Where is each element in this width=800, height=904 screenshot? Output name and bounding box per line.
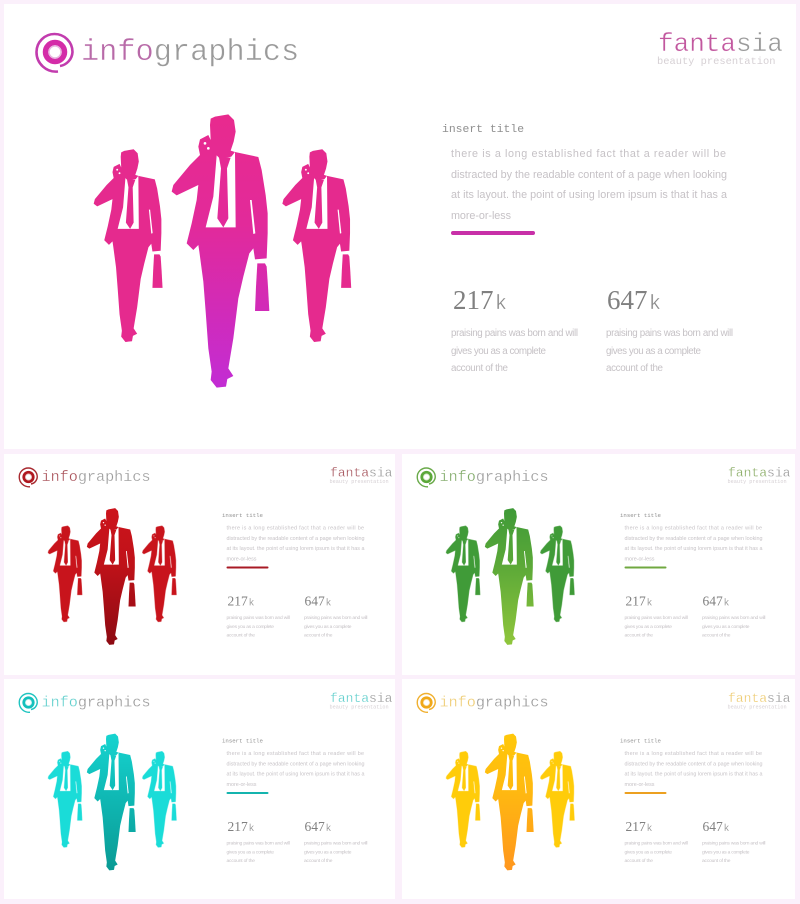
stat description 1: account of the bbox=[624, 632, 653, 638]
icon: green spiral logo bbox=[417, 468, 435, 487]
stat: 217k: k bbox=[495, 293, 507, 316]
stat description 2: account of the bbox=[304, 858, 333, 864]
stat: 217k: k bbox=[248, 598, 255, 610]
panel: yellow slide bbox=[402, 679, 795, 899]
text block: description bbox=[226, 751, 364, 788]
text block: description: at its layout. the point of using lorem ipsum is that it has a bbox=[226, 772, 364, 778]
stat description 2: account of the bbox=[702, 632, 731, 638]
illustration: three businessmen bbox=[94, 114, 351, 388]
text block: description: distracted by the readable content of a page when looking bbox=[451, 169, 727, 181]
stat: 647k: k bbox=[724, 598, 730, 610]
stat description 1: account of the bbox=[226, 632, 255, 638]
text block: description: more-or-less bbox=[451, 210, 512, 222]
stat description 1: praising pains was born and will bbox=[624, 615, 688, 621]
text block: insert title: insert title bbox=[222, 512, 264, 519]
stat description 2: gives you as a complete bbox=[702, 850, 750, 856]
stat description 1: praising pains was born and will bbox=[226, 840, 290, 846]
stat description 2 bbox=[606, 328, 733, 374]
text block: insert title: insert title bbox=[442, 124, 524, 136]
stat description 2: praising pains was born and will bbox=[606, 328, 733, 339]
heading: fantasia: fantasia bbox=[330, 691, 393, 706]
stat description 2 bbox=[304, 615, 368, 638]
stat description 2: praising pains was born and will bbox=[304, 840, 368, 846]
text block: description bbox=[226, 526, 364, 562]
stat description 2: gives you as a complete bbox=[702, 624, 750, 630]
stat description 2 bbox=[702, 615, 766, 638]
illustration: three businessmen bbox=[48, 508, 177, 645]
stat: 647k: 647 bbox=[702, 594, 723, 608]
subheading: beauty presentation: beauty presentation bbox=[657, 56, 775, 68]
accent bar bbox=[226, 792, 268, 794]
stat description 2: gives you as a complete bbox=[304, 850, 352, 856]
stat: 647k: k bbox=[649, 293, 661, 316]
text block: description: at its layout. the point of using lorem ipsum is that it has a bbox=[451, 189, 727, 201]
stat description 1: gives you as a complete bbox=[624, 850, 672, 856]
stat description 1: account of the bbox=[451, 363, 509, 374]
text block: description: distracted by the readable content of a page when looking bbox=[226, 762, 364, 768]
stat description 1: gives you as a complete bbox=[624, 624, 672, 630]
stat description 2: account of the bbox=[702, 858, 731, 864]
stat description 1 bbox=[226, 840, 290, 864]
stat description 2: account of the bbox=[606, 363, 664, 374]
stat: 647k: 647 bbox=[702, 819, 723, 834]
text block: insert title: insert title bbox=[620, 512, 662, 519]
panel: pink main slide bbox=[4, 4, 796, 449]
stat: 647k: k bbox=[326, 823, 332, 835]
stat: 647k: k bbox=[326, 598, 332, 610]
stat description 1: account of the bbox=[624, 858, 653, 864]
accent bar bbox=[451, 231, 535, 235]
stat: 647k: 647 bbox=[304, 594, 325, 608]
heading: infographics: infographics bbox=[42, 468, 151, 486]
panel: teal slide bbox=[4, 679, 395, 899]
stat description 1 bbox=[624, 840, 688, 864]
text block: description: more-or-less bbox=[624, 556, 655, 562]
icon: pink spiral logo bbox=[36, 34, 72, 72]
stat description 1: gives you as a complete bbox=[226, 850, 274, 856]
stat: 217k: k bbox=[646, 823, 653, 835]
stat description 1: praising pains was born and will bbox=[451, 328, 578, 339]
stat: 217k: 217 bbox=[228, 819, 248, 834]
stat: 217k: k bbox=[248, 823, 255, 835]
text block: description: at its layout. the point of using lorem ipsum is that it has a bbox=[624, 772, 762, 778]
subheading: beauty presentation: beauty presentation bbox=[330, 704, 389, 710]
stat description 2: praising pains was born and will bbox=[702, 840, 766, 846]
stat description 1: gives you as a complete bbox=[226, 624, 274, 630]
stat description 1 bbox=[451, 328, 578, 374]
stat description 1: account of the bbox=[226, 858, 255, 864]
stat description 1: praising pains was born and will bbox=[226, 615, 290, 621]
stat description 2 bbox=[304, 840, 368, 864]
heading: fantasia: fantasia bbox=[330, 466, 393, 480]
stat description 1: gives you as a complete bbox=[451, 346, 547, 357]
text block: insert title: insert title bbox=[620, 738, 662, 744]
stat description 1: praising pains was born and will bbox=[624, 840, 688, 846]
illustration: three businessmen bbox=[446, 734, 575, 870]
subheading: beauty presentation: beauty presentation bbox=[728, 704, 787, 710]
text block: description: there is a long established fact that a reader will be bbox=[624, 751, 762, 757]
stat description 2: gives you as a complete bbox=[304, 624, 352, 630]
text block: description bbox=[451, 148, 727, 222]
stat: 647k: 647 bbox=[304, 819, 325, 834]
subheading: beauty presentation: beauty presentation bbox=[728, 479, 787, 485]
text block: description: more-or-less bbox=[624, 782, 655, 788]
heading: fantasia: fantasia bbox=[658, 29, 783, 59]
heading: infographics: infographics bbox=[81, 36, 299, 70]
text block: description: more-or-less bbox=[226, 556, 257, 562]
text block: description: there is a long established fact that a reader will be bbox=[624, 526, 762, 532]
stat: 217k: 217 bbox=[228, 594, 248, 608]
text block: description: distracted by the readable content of a page when looking bbox=[624, 536, 762, 542]
icon: yellow spiral logo bbox=[417, 694, 435, 712]
stat: 217k: 217 bbox=[453, 285, 494, 315]
subheading: beauty presentation: beauty presentation bbox=[330, 479, 389, 485]
illustration: three businessmen bbox=[446, 508, 575, 645]
stat: 217k: 217 bbox=[626, 819, 646, 834]
text block: description: there is a long established fact that a reader will be bbox=[226, 526, 364, 532]
text block: insert title: insert title bbox=[222, 738, 264, 744]
stat description 2: praising pains was born and will bbox=[304, 615, 368, 621]
stat: 647k: 647 bbox=[607, 285, 648, 315]
accent bar bbox=[624, 566, 666, 568]
stat description 1 bbox=[624, 615, 688, 638]
text block: description: more-or-less bbox=[226, 782, 257, 788]
panel: green slide bbox=[402, 454, 795, 675]
stat: 217k: 217 bbox=[626, 594, 646, 608]
text block: description: there is a long established fact that a reader will be bbox=[226, 751, 364, 757]
icon: red spiral logo bbox=[19, 468, 37, 487]
text block: description bbox=[624, 751, 762, 788]
text block: description: distracted by the readable content of a page when looking bbox=[624, 762, 762, 768]
illustration: three businessmen bbox=[48, 734, 177, 870]
text block: description: there is a long established fact that a reader will be bbox=[451, 148, 726, 160]
stat description 2 bbox=[702, 840, 766, 864]
text block: description bbox=[624, 526, 762, 562]
stat: 217k: k bbox=[646, 598, 653, 610]
text block: description: at its layout. the point of using lorem ipsum is that it has a bbox=[624, 546, 762, 552]
stat description 1 bbox=[226, 615, 290, 638]
text block: description: at its layout. the point of using lorem ipsum is that it has a bbox=[226, 546, 364, 552]
accent bar bbox=[226, 566, 268, 568]
heading: fantasia: fantasia bbox=[728, 691, 791, 706]
stat description 2: gives you as a complete bbox=[606, 346, 702, 357]
text block: description: distracted by the readable content of a page when looking bbox=[226, 536, 364, 542]
panel: red slide bbox=[4, 454, 395, 675]
heading: infographics: infographics bbox=[42, 694, 151, 712]
heading: infographics: infographics bbox=[440, 468, 549, 486]
accent bar bbox=[624, 792, 666, 794]
stat description 2: praising pains was born and will bbox=[702, 615, 766, 621]
heading: infographics: infographics bbox=[440, 694, 549, 712]
stat description 2: account of the bbox=[304, 632, 333, 638]
icon: teal spiral logo bbox=[19, 694, 37, 712]
stat: 647k: k bbox=[724, 823, 730, 835]
heading: fantasia: fantasia bbox=[728, 466, 791, 480]
